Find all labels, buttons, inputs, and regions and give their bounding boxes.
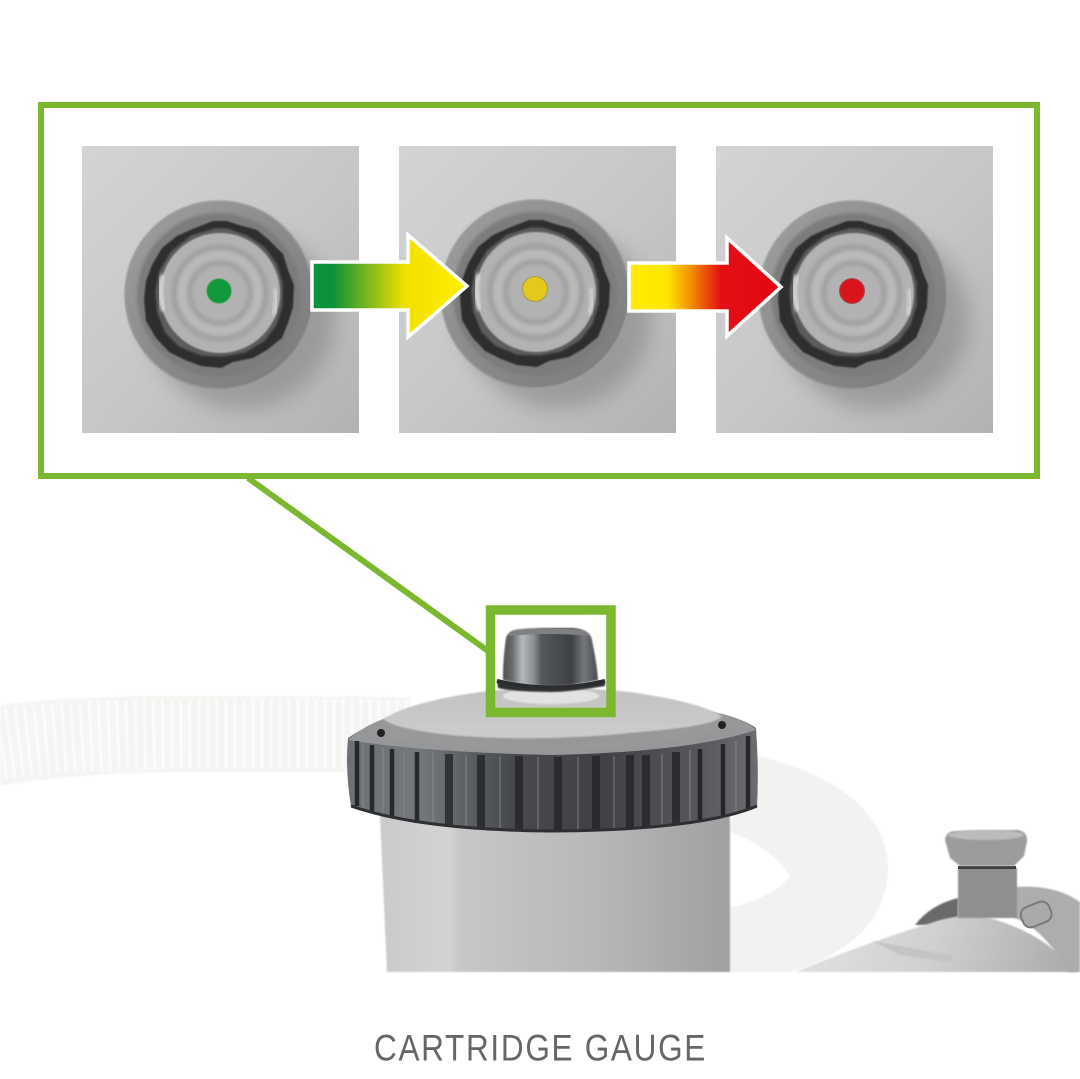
- ring ribs: [357, 736, 748, 823]
- hose: right loop: [730, 752, 888, 972]
- arrow: green to yellow: [312, 235, 467, 337]
- illustration: filter pump photo: [0, 628, 1080, 972]
- photo: red gauge indicator: [716, 146, 993, 433]
- photo: green gauge indicator: [82, 146, 359, 433]
- hose: rear left: [0, 696, 410, 786]
- gauge knob: [497, 628, 605, 704]
- cartridge lid: [377, 688, 726, 751]
- callout: highlight box around gauge: [490, 610, 611, 712]
- caption: CARTRIDGE GAUGE: [374, 1028, 707, 1068]
- pump body: [795, 830, 1080, 972]
- pump logo label: [872, 941, 956, 963]
- arrow: yellow to red: [629, 238, 781, 336]
- pump neck and nut: [958, 868, 1017, 918]
- callout: connector line: [248, 478, 488, 651]
- panel frame: [41, 105, 1037, 476]
- photo: yellow gauge indicator: [399, 146, 676, 433]
- threaded ring: [347, 706, 758, 831]
- cartridge cylinder: [380, 815, 730, 972]
- pump side bolt: [1018, 899, 1054, 930]
- panel: gauge status sequence: [41, 105, 1037, 476]
